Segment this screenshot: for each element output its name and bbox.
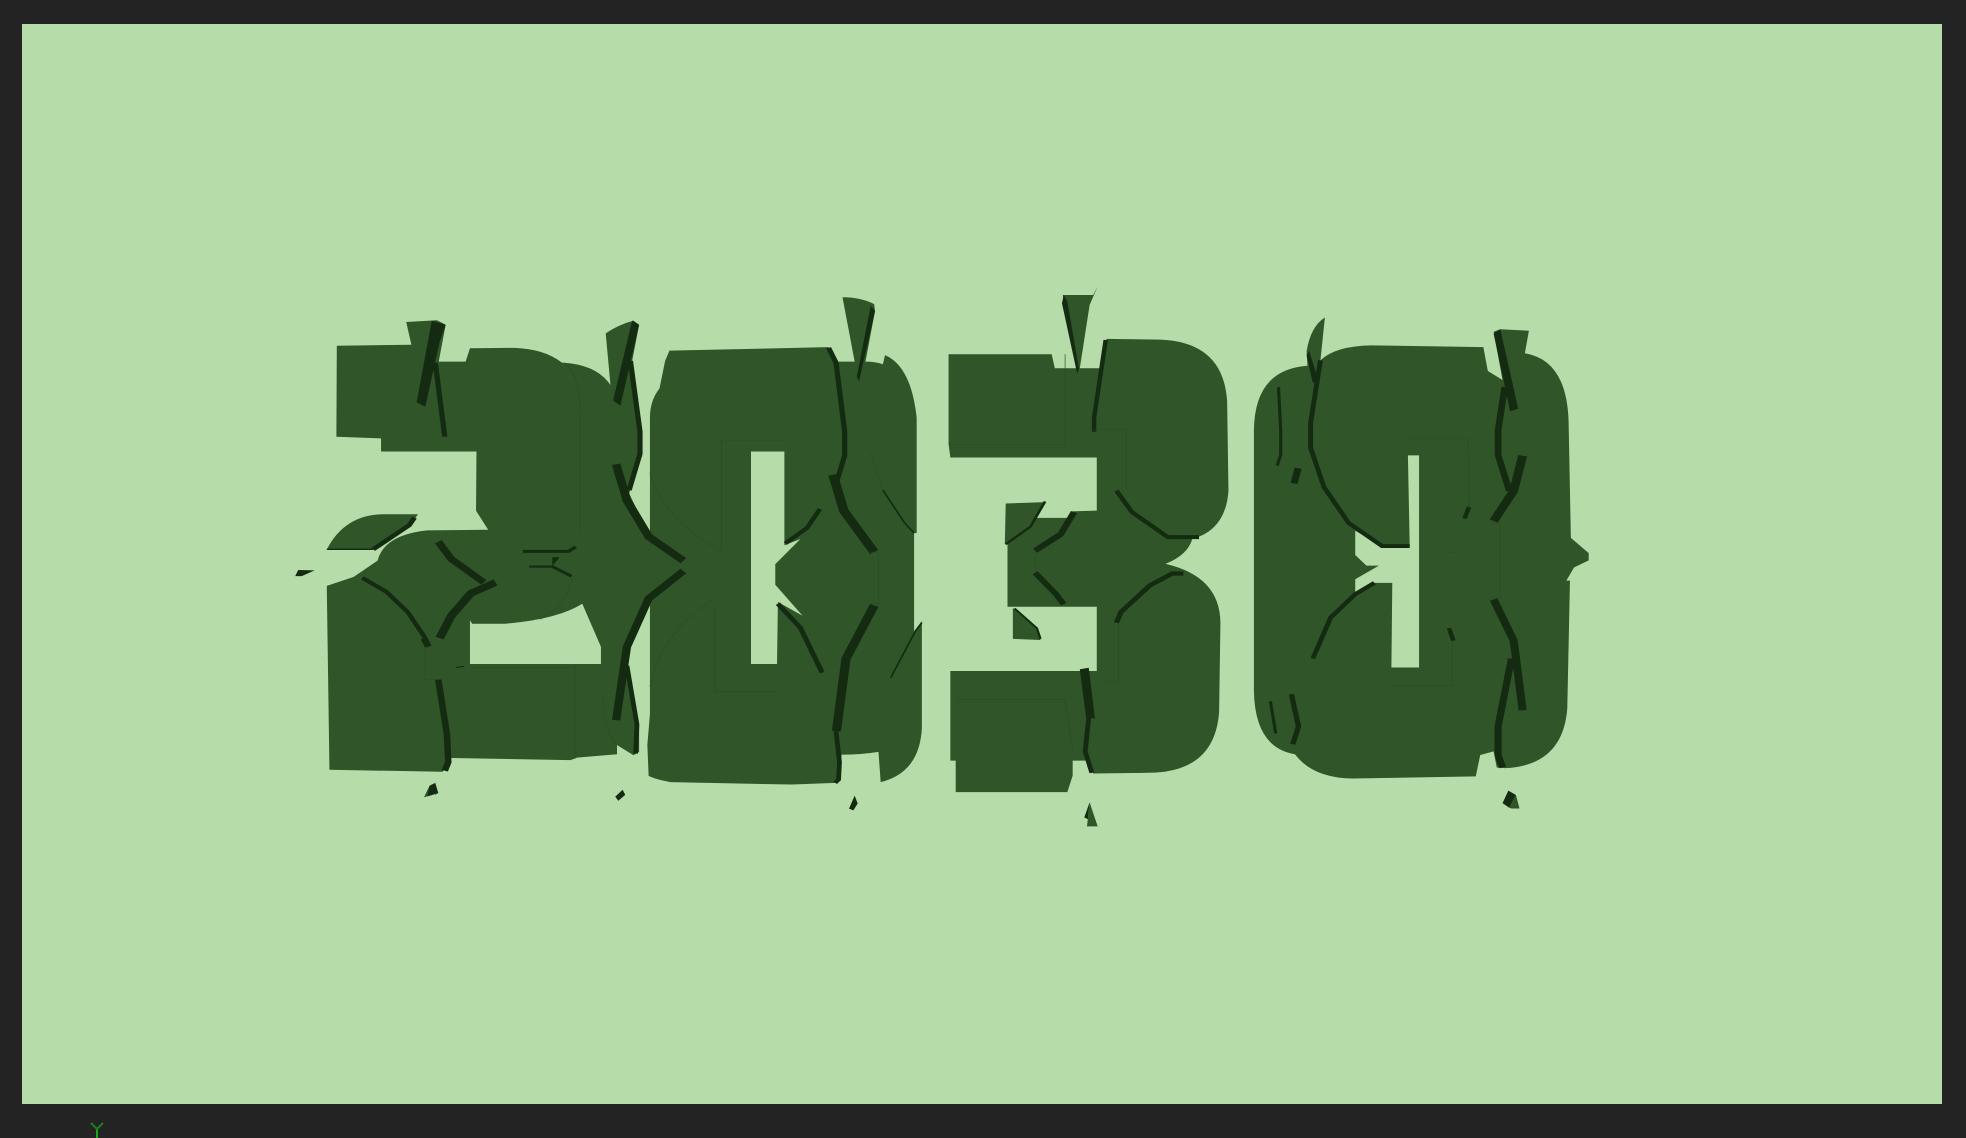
digit 3 cracks [1006,295,1199,773]
digit 2 detached shard [327,514,418,549]
digit 2 cracks [327,321,683,771]
digit 0 cracks [778,306,922,783]
digit 3 shard [1013,608,1041,640]
digit 2 body [327,320,686,772]
digit 3 body [949,286,1228,792]
faint extrusion outlines [425,363,883,759]
Y axis gizmo icon [91,1123,103,1138]
digit 0 second body [1254,317,1589,779]
faint extrusion outlines [950,354,1500,751]
debris fragments under digits 3 and 0 [1084,791,1520,826]
digit 0 body [647,297,922,785]
second digit 0 cracks [1270,329,1523,767]
digits 2 and 0 [295,297,922,810]
digits 3 and 0 [949,286,1589,826]
debris fragments under digits 2 and 0 [295,570,858,810]
